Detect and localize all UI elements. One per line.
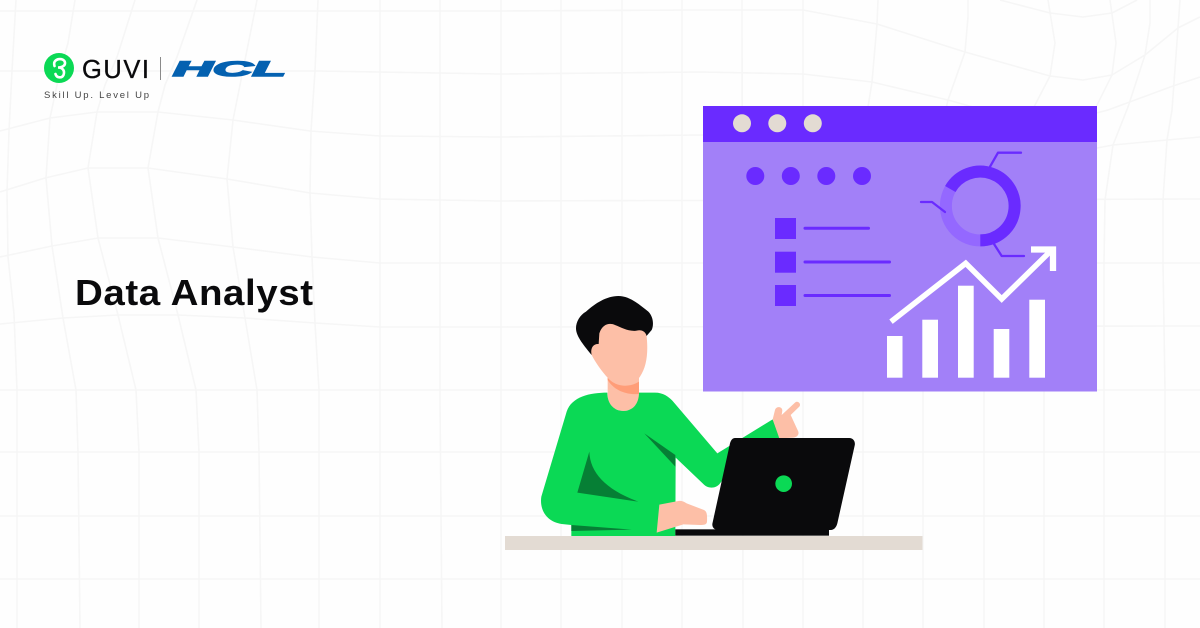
logo: GUVI and HCL (44, 53, 286, 101)
GUVI wordmark: GUVI (82, 56, 149, 84)
neck shadow (608, 378, 639, 394)
HCL wordmark: HCL (173, 58, 286, 81)
hair (576, 296, 653, 355)
icon: GUVI green circle mark (44, 53, 74, 83)
arrow: rising trend line (891, 250, 1053, 322)
person with laptop (541, 296, 855, 536)
donut chart (921, 153, 1024, 256)
window title bar (703, 106, 1097, 142)
logo divider (160, 57, 161, 80)
sweater (541, 393, 780, 536)
panel body (703, 106, 1097, 392)
pointing hand (773, 402, 800, 438)
face (591, 324, 647, 385)
laptop logo dot (775, 475, 792, 492)
legend list (775, 218, 890, 306)
neck (608, 373, 639, 411)
title: Data Analyst (75, 272, 313, 313)
tagline: Skill Up. Level Up (44, 90, 149, 101)
typing hand (657, 501, 707, 533)
laptop lid (712, 438, 855, 530)
desk (505, 536, 922, 550)
laptop base (675, 529, 829, 536)
window control dots (733, 114, 822, 132)
panel: dashboard window (703, 106, 1097, 392)
bar chart (887, 286, 1045, 378)
row of four dots (746, 167, 871, 185)
sweater shadows (571, 433, 675, 531)
